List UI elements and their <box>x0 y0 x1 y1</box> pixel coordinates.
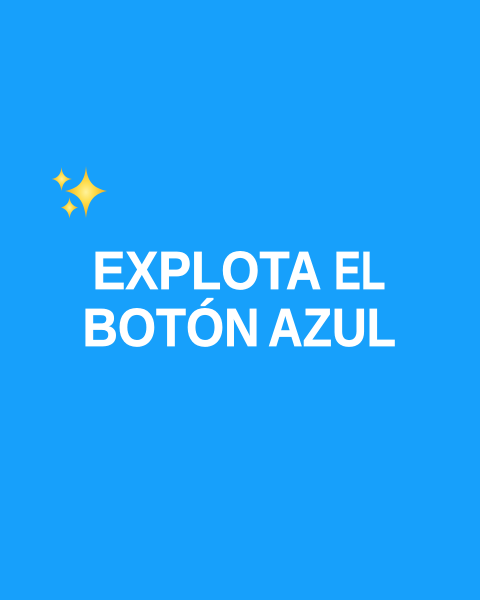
title: EL <box>334 241 386 301</box>
title: EXPLOTA <box>92 241 322 301</box>
title: AZUL <box>268 298 396 358</box>
icon: sparkles <box>52 166 107 218</box>
title <box>82 241 396 358</box>
title: BOTÓN <box>82 298 260 358</box>
